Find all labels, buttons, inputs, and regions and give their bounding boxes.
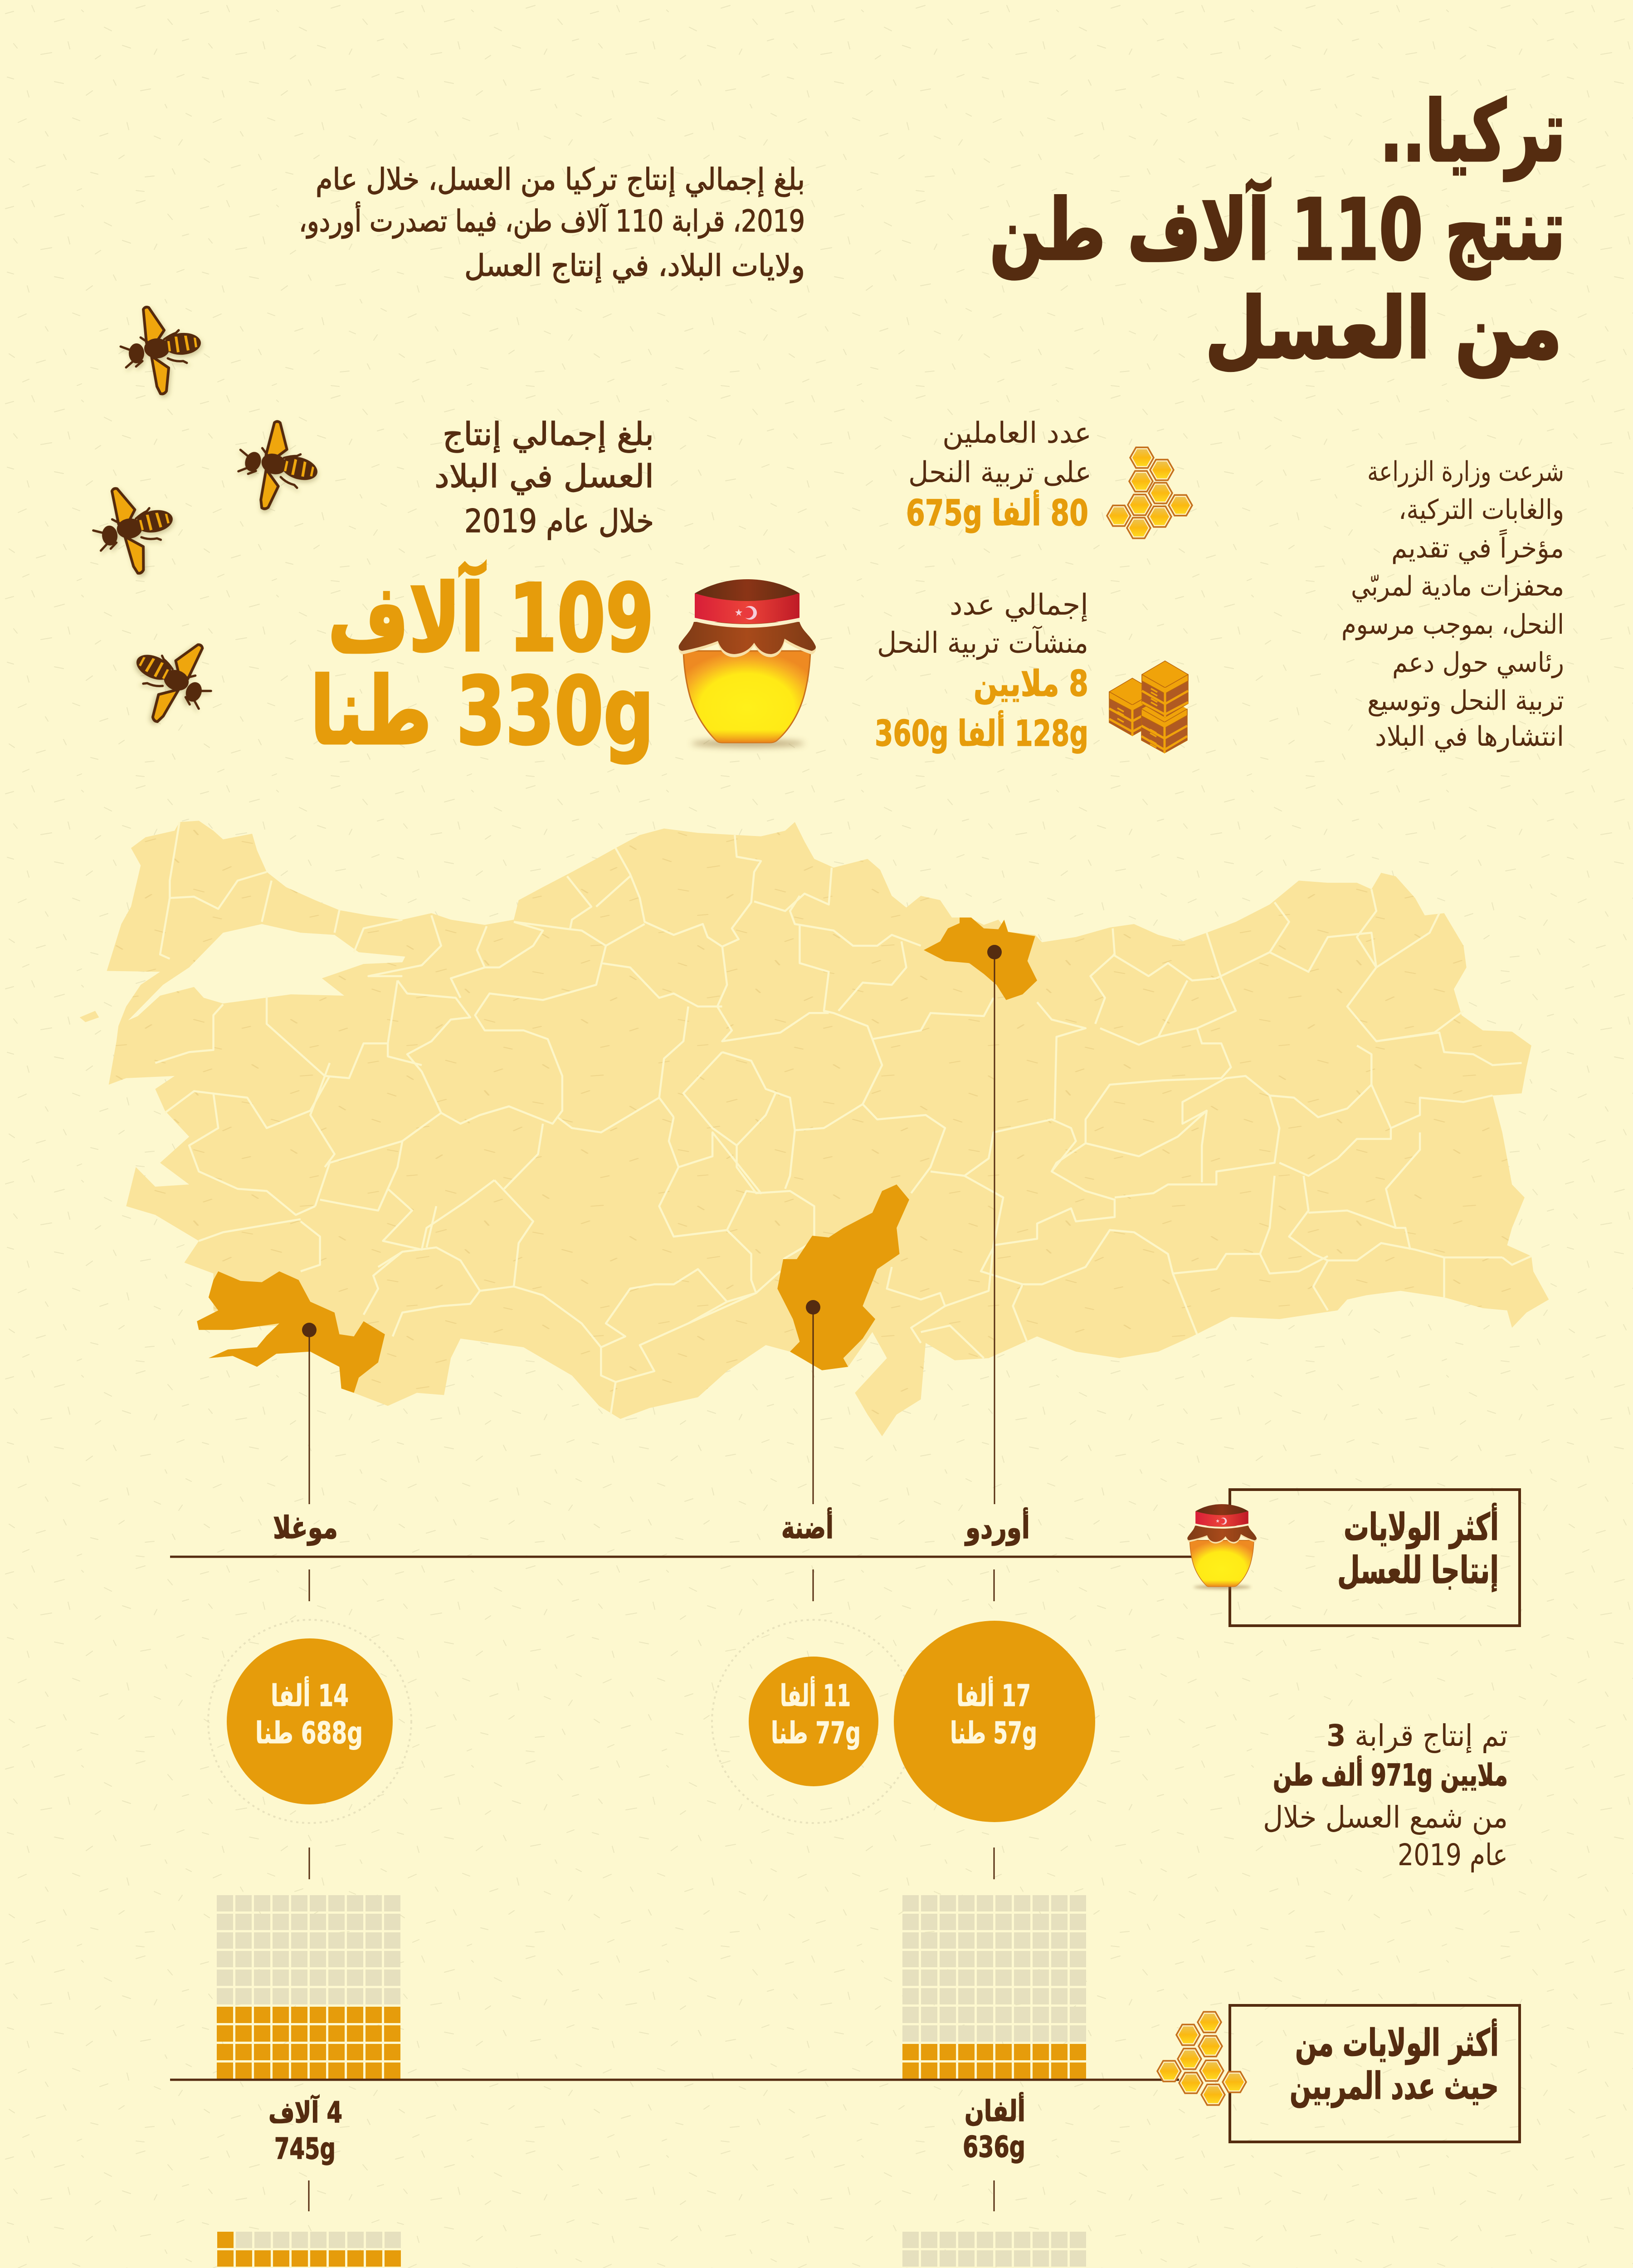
icon: honeycomb <box>1106 446 1193 539</box>
text: national honey total label: خلال عام 2019 <box>464 503 654 540</box>
big number: national honey total: 330g طنا <box>310 658 654 766</box>
bubble: Adana honey <box>712 1620 915 1823</box>
province highlight: Ordu <box>924 918 1037 1000</box>
island <box>80 1011 99 1022</box>
waffle chart: Ordu apiaries <box>902 2232 1086 2268</box>
icon: bee 1 <box>121 307 202 394</box>
bubble: Ordu honey: 17 ألفا <box>956 1676 1031 1713</box>
stat: apiaries: 128g ألفا 360g <box>875 710 1088 754</box>
intro text: 2019، قرابة 110 آلاف طن، فيما تصدرت أوردو، <box>299 201 805 239</box>
stat: apiaries: 8 ملايين <box>974 664 1088 704</box>
text: beeswax production: عام 2019 <box>1398 1838 1508 1872</box>
province highlight: Adana <box>777 1184 909 1370</box>
honey section: province names: موغلا <box>273 1510 338 1546</box>
text: beeswax production <box>1263 1718 1508 1872</box>
icon: small honey jar <box>1187 1504 1257 1589</box>
text: ministry support: انتشارها في البلاد <box>1375 721 1564 753</box>
sea of Marmara <box>128 924 405 1021</box>
honey section: province names: أضنة <box>781 1507 834 1546</box>
title: تنتج 110 آلاف طن <box>990 178 1565 280</box>
waffle chart: Ordu beekeepers <box>902 1895 1086 2079</box>
bubble: Ordu honey: 57g طنا <box>950 1716 1037 1750</box>
stat: apiaries: منشآت تربية النحل <box>877 625 1088 660</box>
icon: honey jar <box>679 579 816 748</box>
text: national honey total label: العسل في البلاد <box>434 458 654 495</box>
text: national honey total label <box>434 415 654 540</box>
value: Mugla beekeepers: 745g <box>274 2132 336 2166</box>
honey section: province names: أوردو <box>965 1507 1030 1546</box>
label box: top honey provinces <box>1230 1490 1520 1626</box>
bubble: Mugla honey <box>208 1620 411 1823</box>
text: ministry support: والغابات التركية، <box>1399 494 1564 526</box>
bubble: Adana honey: 77g طنا <box>771 1716 861 1750</box>
value: Ordu beekeepers: 636g <box>963 2131 1025 2164</box>
bubble: Adana honey: 11 ألفا <box>780 1676 851 1713</box>
province borders <box>155 822 1531 1415</box>
text: ministry support: تربية النحل وتوسيع <box>1367 685 1564 717</box>
stat: beekeepers: على تربية النحل <box>908 456 1092 489</box>
value: Mugla beekeepers: 4 آلاف <box>268 2094 342 2130</box>
bubble: Mugla honey: 14 ألفا <box>271 1676 349 1713</box>
waffle chart: Mugla beekeepers <box>217 1895 400 2079</box>
text: ministry support: النحل، بموجب مرسوم <box>1341 609 1564 640</box>
map of Turkey <box>80 821 1549 1436</box>
text: ministry support: رئاسي حول دعم <box>1392 647 1564 679</box>
text: ministry support <box>1341 456 1564 753</box>
value: Ordu beekeepers: ألفان <box>965 2092 1025 2128</box>
icon: bee 3 <box>89 483 179 577</box>
value: Ordu beekeepers <box>963 2092 1025 2164</box>
stat: apiaries <box>875 588 1088 754</box>
stat: apiaries: إجمالي عدد <box>950 588 1088 622</box>
label box: top beekeeper provinces <box>1230 2005 1520 2142</box>
province highlight: Mugla <box>197 1271 385 1393</box>
title: من العسل <box>1205 279 1562 378</box>
intro text: بلغ إجمالي إنتاج تركيا من العسل، خلال عام <box>316 162 805 197</box>
bubble: Mugla honey: 688g طنا <box>255 1716 363 1750</box>
text: beeswax production: ملايين 971g ألف طن <box>1273 1755 1508 1793</box>
big number: national honey total <box>310 561 654 766</box>
text: ministry support: شرعت وزارة الزراعة <box>1367 456 1564 488</box>
icon: bee 4 <box>119 626 224 735</box>
icon: honeycomb small <box>1156 2011 1247 2106</box>
text: ministry support: مؤخراً في تقديم <box>1391 529 1564 564</box>
intro text <box>299 162 805 284</box>
value: Mugla beekeepers <box>268 2094 342 2166</box>
stat: beekeepers: عدد العاملين <box>942 416 1092 450</box>
label box: top beekeeper provinces: حيث عدد المربين <box>1290 2065 1499 2108</box>
icon: beehive boxes <box>1109 661 1188 753</box>
text: beeswax production: من شمع العسل خلال <box>1263 1800 1508 1835</box>
big number: national honey total: 109 آلاف <box>328 561 654 673</box>
title <box>990 83 1565 378</box>
icon: bee 2 <box>224 413 330 522</box>
intro text: ولايات البلاد، في إنتاج العسل <box>464 248 805 284</box>
map pins and leader lines <box>302 945 1002 1504</box>
label box: top honey provinces: أكثر الولايات <box>1344 1503 1499 1549</box>
label box: top honey provinces: إنتاجا للعسل <box>1337 1549 1499 1593</box>
stat: beekeepers <box>906 416 1092 534</box>
waffle chart: Mugla apiaries <box>217 2232 401 2268</box>
text: beeswax production: تم إنتاج قرابة 3 <box>1326 1718 1508 1754</box>
text: ministry support: محفزات مادية لمربّي <box>1351 571 1564 602</box>
honey section: province names <box>273 1507 1030 1546</box>
bubble: Ordu honey <box>894 1621 1095 1822</box>
label box: top beekeeper provinces: أكثر الولايات من <box>1295 2019 1499 2065</box>
stat: beekeepers: 80 ألفا 675g <box>906 490 1088 534</box>
text: national honey total label: بلغ إجمالي إنتاج <box>443 415 654 453</box>
